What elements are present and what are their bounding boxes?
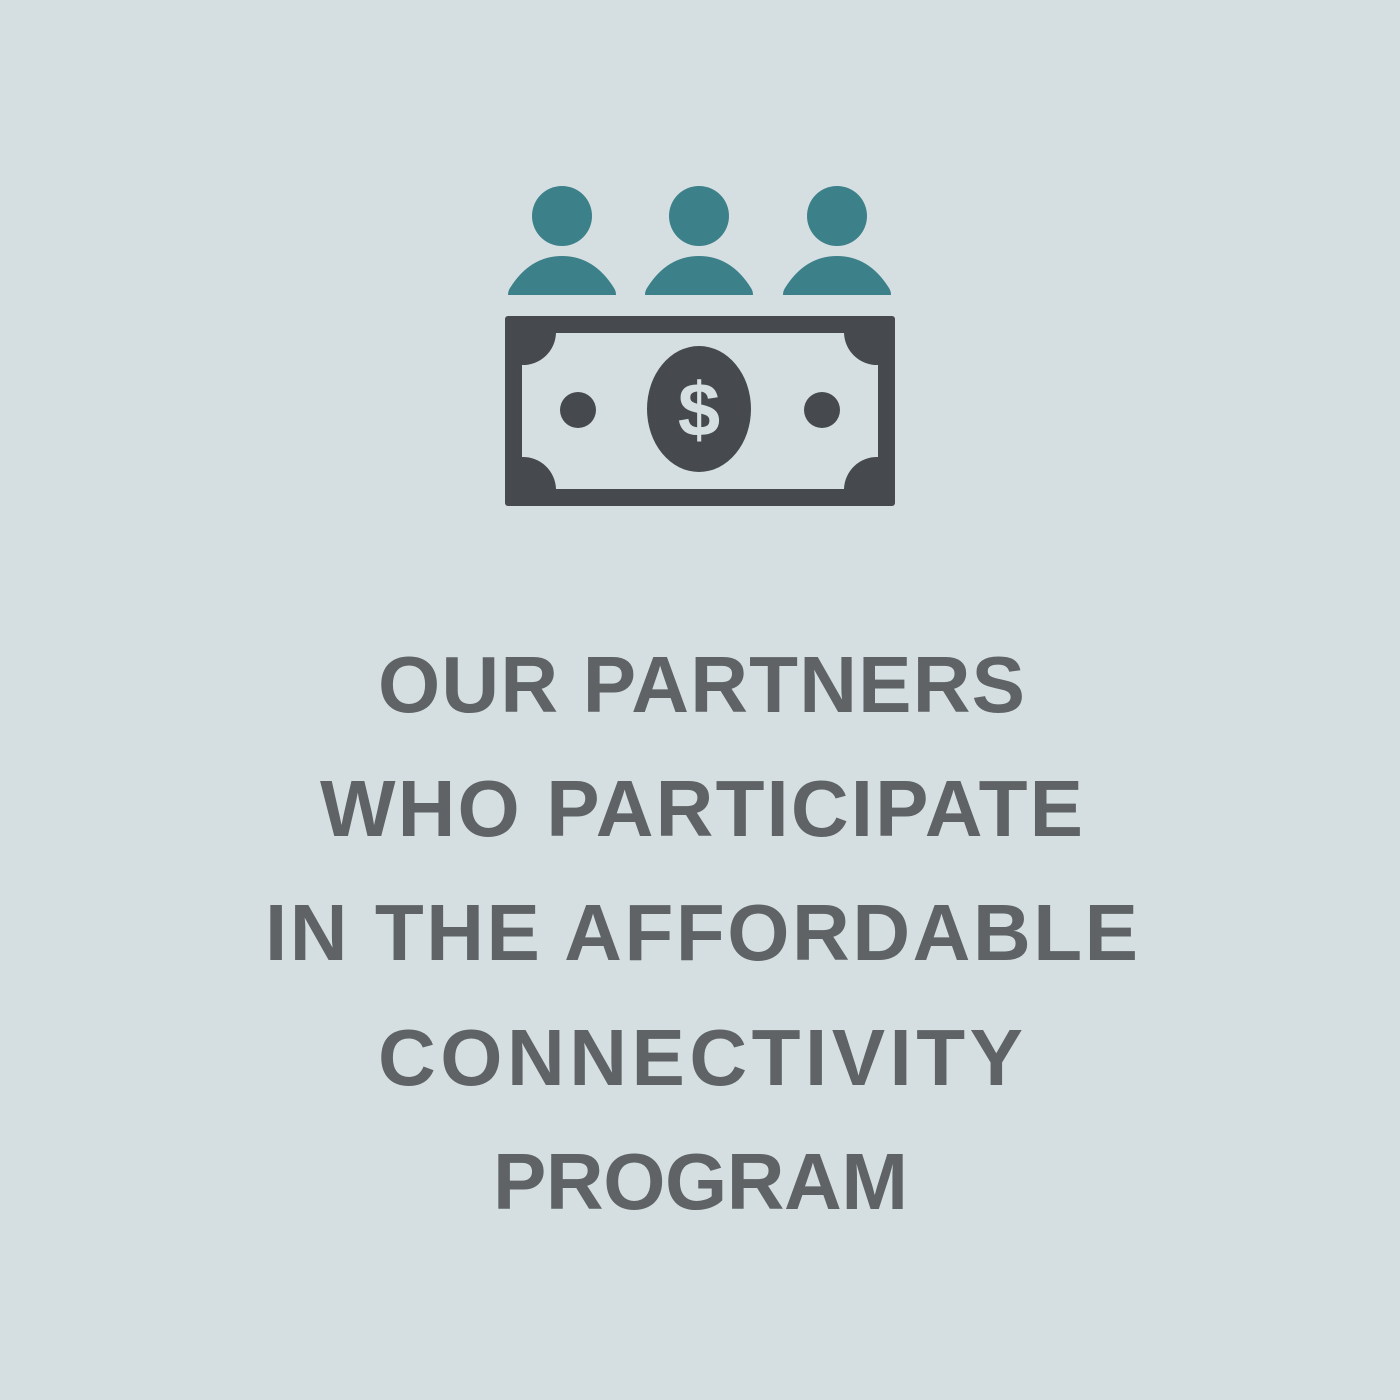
title text: OUR PARTNERS [378,640,1025,729]
title text: WHO PARTICIPATE [320,764,1083,853]
icon: three people [508,186,891,295]
icon: people with money [505,186,895,506]
title text: CONNECTIVITY [378,1013,1023,1102]
title text: IN THE AFFORDABLE [265,888,1138,977]
title text: PROGRAM [493,1137,908,1226]
title text [265,640,1138,1226]
icon: dollar bill [505,316,895,506]
icon: dollar bill: $ [678,368,720,453]
